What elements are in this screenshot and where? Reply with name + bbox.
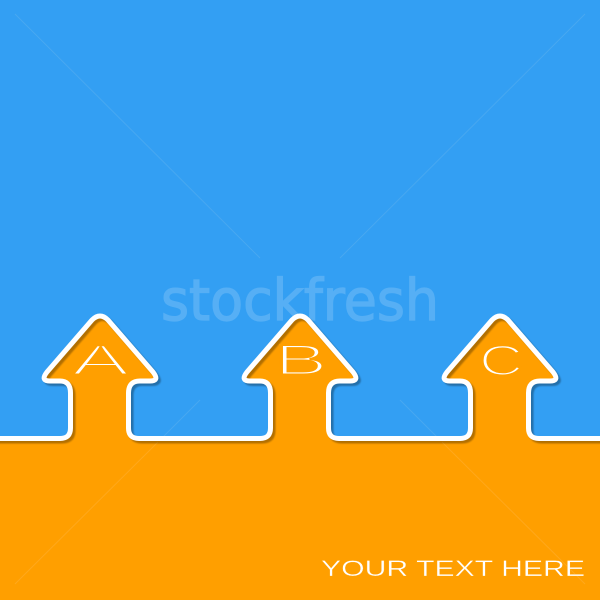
watermark diagonal lines	[15, 14, 585, 440]
arrow label C: C	[479, 337, 523, 385]
arrow label B: B	[274, 335, 328, 384]
watermark text: stockfresh	[161, 268, 439, 334]
lower diagonal watermark lines	[15, 442, 585, 584]
white arrow outline	[0, 316, 600, 438]
orange lower panel with arrows	[0, 316, 600, 600]
outline shadow	[0, 318, 600, 441]
caption text: YOUR TEXT HERE	[321, 556, 585, 581]
arrow label A: A	[72, 336, 130, 384]
